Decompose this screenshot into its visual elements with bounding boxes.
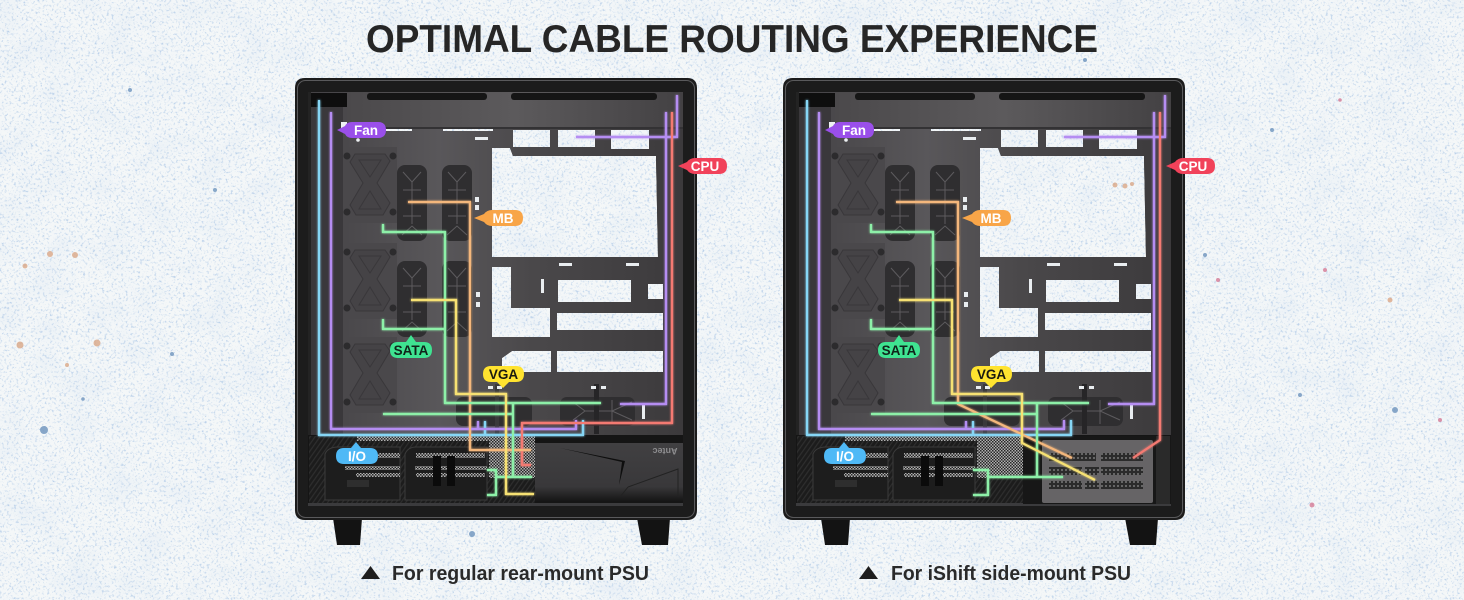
tag: CPU — [1166, 158, 1215, 174]
tag: CPU — [678, 158, 727, 174]
cable: I/O — [807, 100, 1071, 435]
tag: Fan: Fan — [354, 123, 378, 138]
title: OPTIMAL CABLE ROUTING EXPERIENCE — [366, 18, 1098, 61]
cable: MB — [408, 202, 531, 450]
cable: CPU — [522, 112, 672, 465]
cable: MB — [896, 202, 1072, 458]
cable: I/O — [319, 100, 583, 435]
cable: fan — [331, 95, 677, 429]
cable: SATA — [383, 224, 601, 495]
tag: CPU: CPU — [691, 159, 719, 174]
tag: VGA: VGA — [977, 367, 1006, 382]
tag: VGA — [483, 366, 524, 388]
panel: case with side-mount PSU — [783, 78, 1215, 545]
tag: MB: MB — [492, 211, 514, 226]
tag: I/O: I/O — [836, 449, 854, 464]
tag: SATA: SATA — [882, 343, 917, 358]
rear-mount PSU — [535, 443, 683, 501]
tag: SATA — [878, 335, 920, 358]
tag: Fan — [825, 122, 874, 138]
caption: rear-mount PSU: For regular rear-mount PSU — [392, 563, 649, 585]
tag: MB — [474, 210, 523, 226]
tag: Fan — [337, 122, 386, 138]
cable: SATA — [871, 224, 1089, 495]
cable: VGA — [899, 300, 1095, 480]
tag: I/O — [336, 442, 378, 464]
panel: case with rear-mount PSU — [295, 78, 727, 545]
cable: CPU — [1133, 112, 1160, 458]
tag: VGA: VGA — [489, 367, 518, 382]
cable: VGA — [411, 300, 534, 494]
tag: CPU: CPU — [1179, 159, 1207, 174]
tag: SATA: SATA — [394, 343, 429, 358]
side-mount PSU area — [977, 436, 1171, 504]
caption: side-mount PSU: For iShift side-mount PSU — [891, 563, 1131, 585]
tag: MB: MB — [980, 211, 1002, 226]
cables: right case — [807, 95, 1165, 495]
chassis: right case — [783, 78, 1185, 545]
tag: VGA — [971, 366, 1012, 388]
tag: I/O — [824, 442, 866, 464]
tag: Fan: Fan — [842, 123, 866, 138]
tag: I/O: I/O — [348, 449, 366, 464]
rear-mount PSU: Antec — [652, 446, 678, 456]
cable: fan — [819, 95, 1165, 429]
tag: MB — [962, 210, 1011, 226]
tag: SATA — [390, 335, 432, 358]
cables: left case — [319, 95, 677, 495]
chassis: left case — [295, 78, 697, 545]
